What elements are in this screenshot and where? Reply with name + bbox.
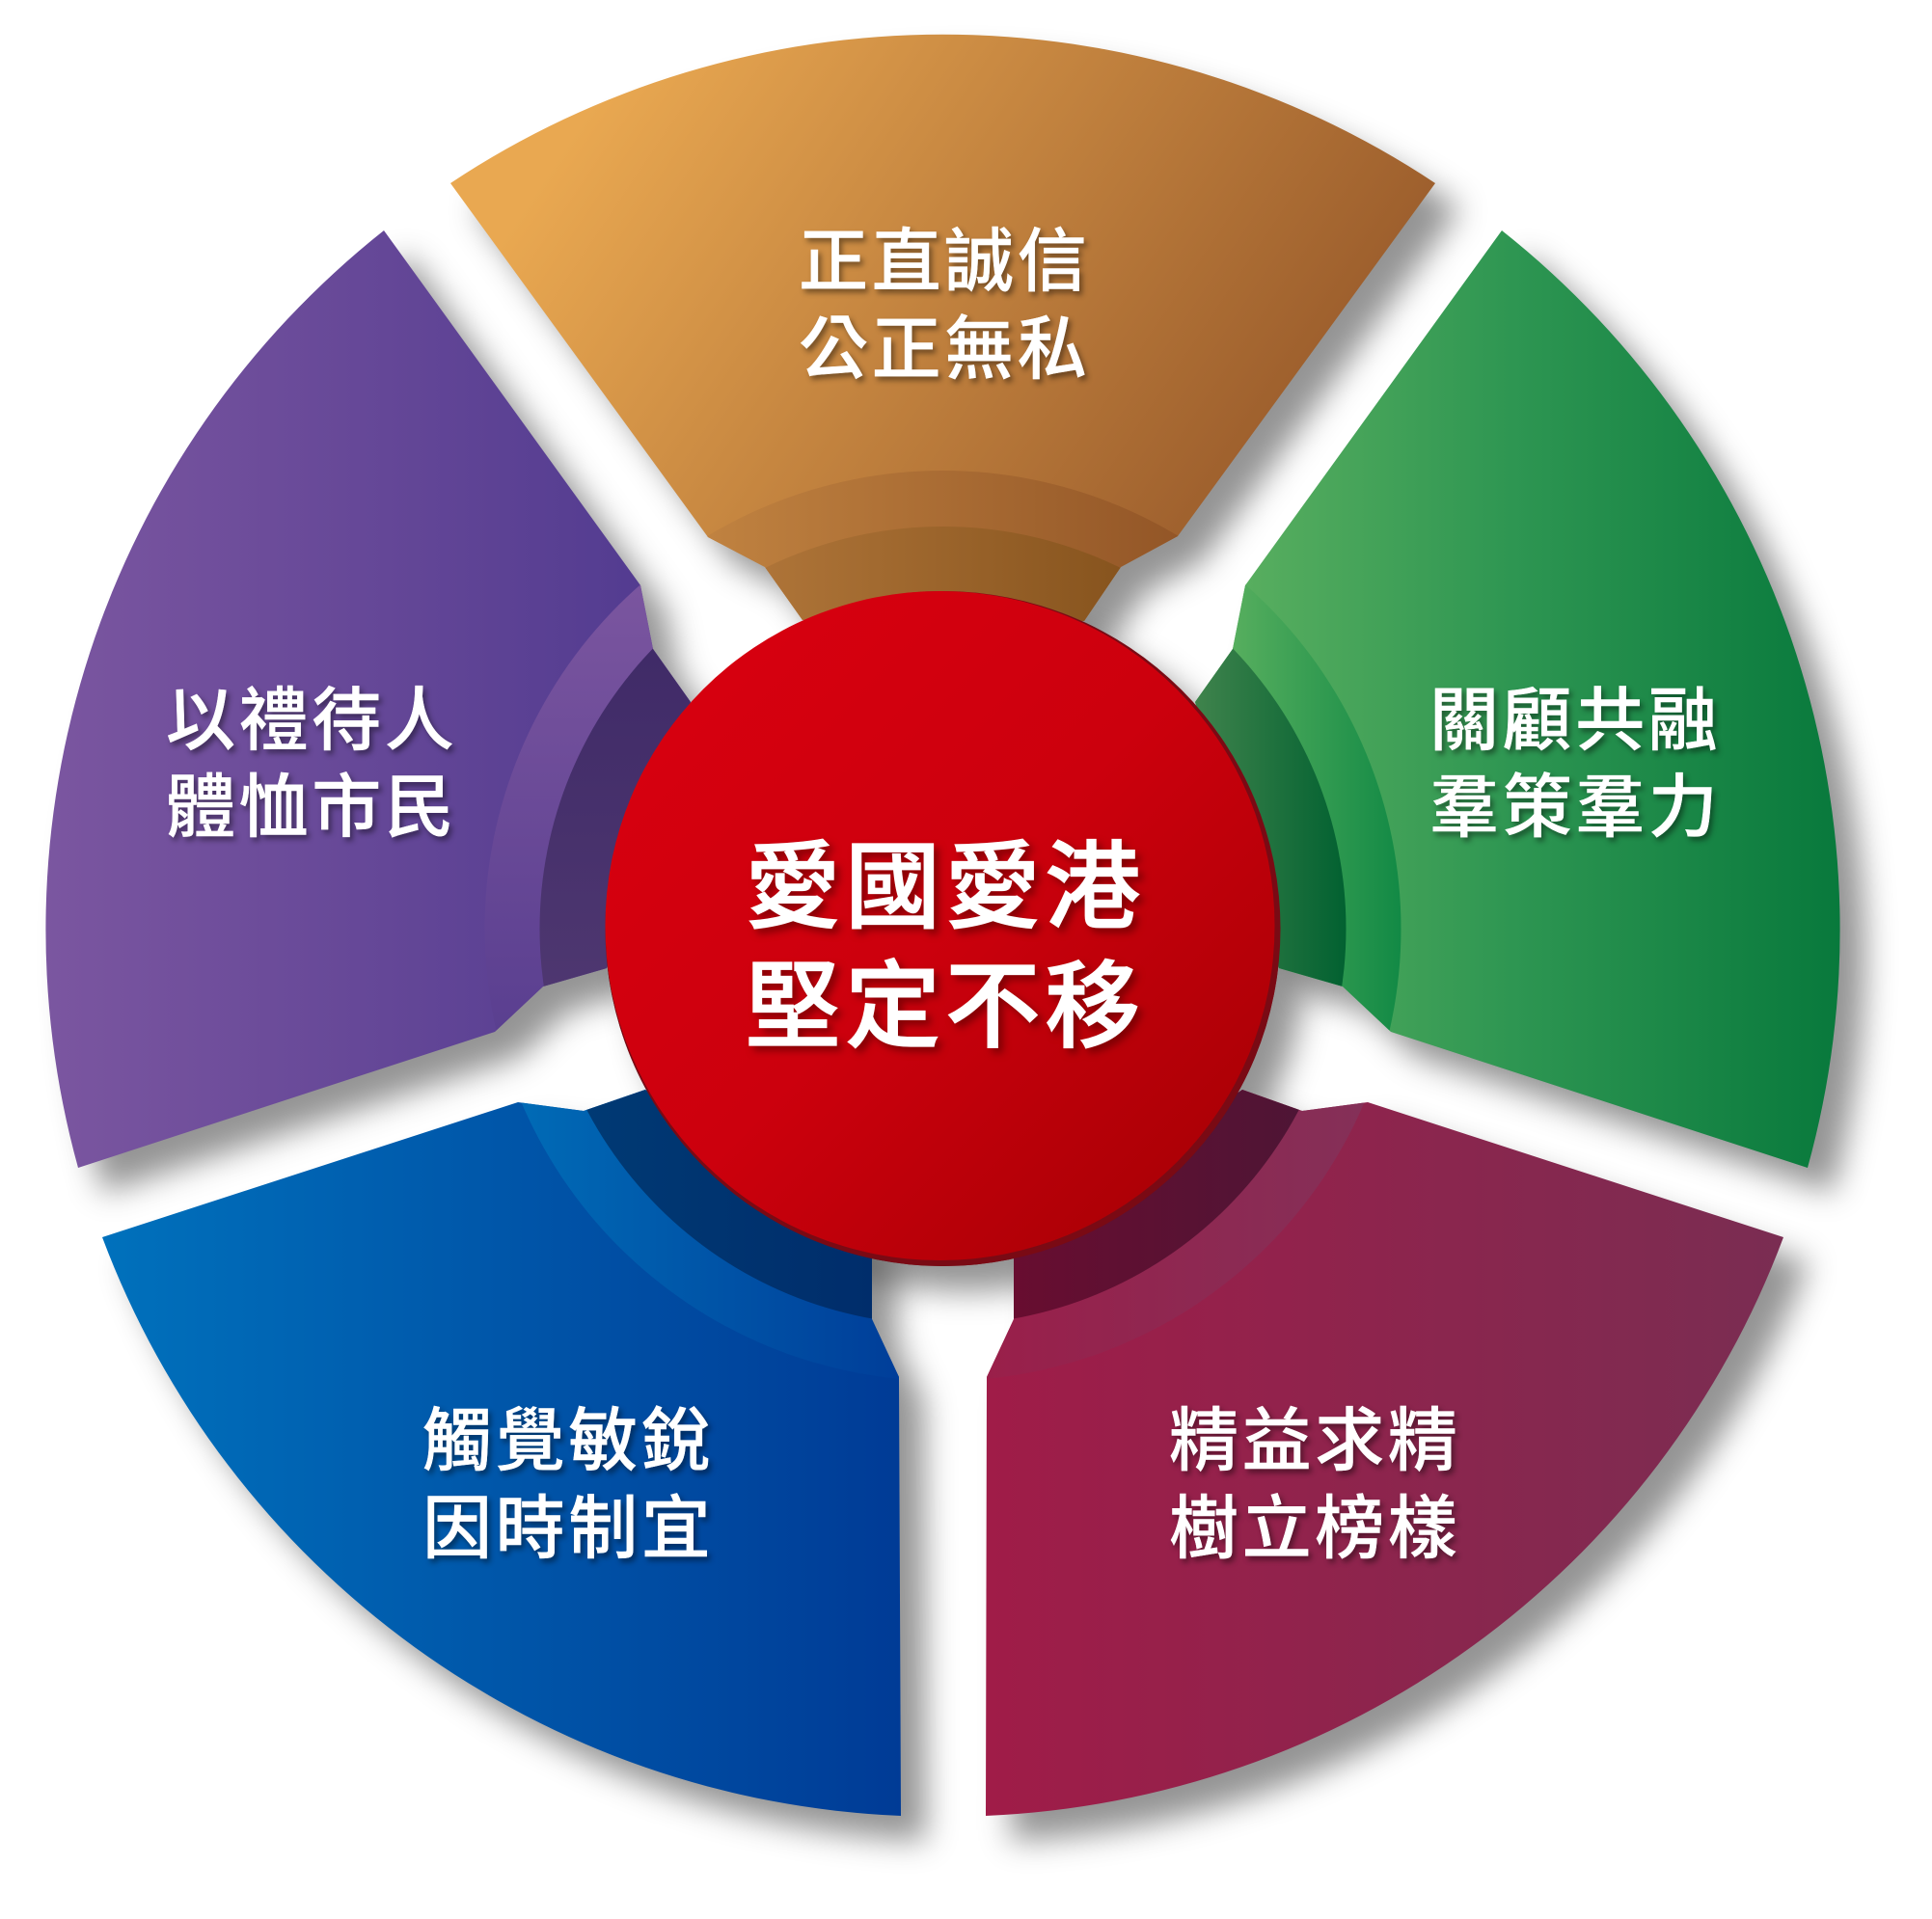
segment shape: blue bbox=[102, 1090, 947, 1859]
panel: bottom-left segment bbox=[102, 1090, 947, 1859]
panel: left segment bbox=[45, 230, 710, 1207]
text: right segment: 羣策羣力 bbox=[1429, 770, 1721, 847]
segment shape: green bbox=[1195, 230, 1886, 1207]
text: bottom-left segment bbox=[422, 1403, 714, 1568]
circle: red hub bbox=[606, 591, 1281, 1266]
text: centre slogan bbox=[745, 833, 1145, 1060]
text: right segment: 關顧共融 bbox=[1429, 683, 1721, 760]
text: left segment: 以禮待人 bbox=[166, 683, 457, 760]
panel: right segment bbox=[1195, 230, 1886, 1207]
text: bottom-right segment bbox=[1169, 1403, 1460, 1568]
panel: top segment bbox=[450, 35, 1472, 648]
panel: centre circle bbox=[606, 591, 1281, 1266]
text: bottom-right segment: 樹立榜樣 bbox=[1169, 1491, 1460, 1568]
text: bottom-right segment: 精益求精 bbox=[1169, 1403, 1460, 1480]
segment shape: purple bbox=[45, 230, 710, 1207]
text: centre slogan: 堅定不移 bbox=[745, 953, 1145, 1060]
segment shape: orange bbox=[450, 35, 1472, 648]
text: left segment bbox=[166, 683, 457, 847]
text: bottom-left segment: 因時制宜 bbox=[422, 1491, 714, 1568]
text: top segment bbox=[799, 224, 1090, 389]
text: top segment: 公正無私 bbox=[799, 311, 1090, 389]
segment shape: maroon bbox=[986, 1090, 1822, 1859]
text: top segment: 正直誠信 bbox=[799, 224, 1090, 301]
text: left segment: 體恤市民 bbox=[166, 770, 457, 847]
panel: bottom-right segment bbox=[986, 1090, 1822, 1859]
text: right segment bbox=[1429, 683, 1721, 847]
text: bottom-left segment: 觸覺敏銳 bbox=[422, 1403, 714, 1480]
text: centre slogan: 愛國愛港 bbox=[745, 833, 1145, 940]
